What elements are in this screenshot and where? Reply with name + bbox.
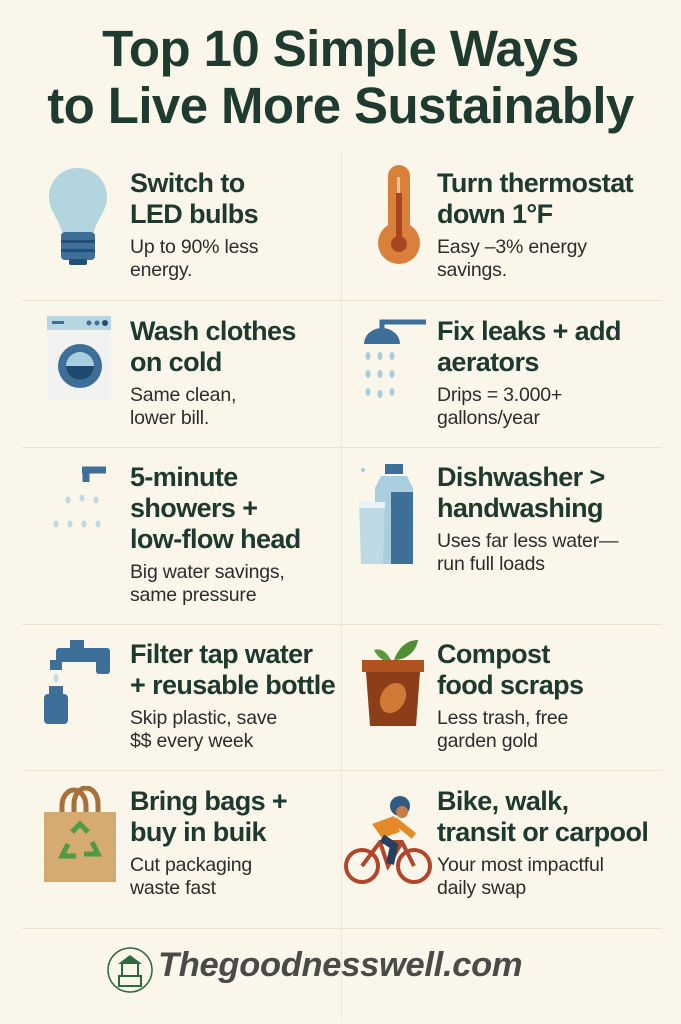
item: showers: low-flow head (130, 524, 301, 554)
item: LED: LED bulbs (130, 199, 258, 229)
icon: cyclist (344, 796, 432, 884)
item: dishwasher (437, 462, 618, 575)
item: wash cold (130, 316, 296, 429)
item: leaks: Fix leaks + add (437, 316, 621, 346)
item: wash cold: on cold (130, 347, 222, 377)
item: filter (130, 639, 335, 752)
item: compost: Less trash, free (437, 707, 568, 729)
item: leaks: gallons/year (437, 407, 540, 429)
item: bags (130, 786, 287, 899)
item: filter: $$ every week (130, 730, 253, 752)
icon: faucet drops (54, 466, 106, 528)
item: compost: food scraps (437, 670, 583, 700)
icon: washing machine (47, 316, 111, 400)
item: dishwasher: handwashing (437, 493, 603, 523)
item: wash cold: Same clean, (130, 384, 236, 406)
icon: light bulb (49, 168, 107, 265)
icon: well logo (107, 947, 153, 993)
item: showers: 5-minute (130, 462, 238, 492)
title: to Live More Sustainably (47, 77, 634, 134)
item: filter: + reusable bottle (130, 670, 335, 700)
item: thermostat: down 1°F (437, 199, 552, 229)
item: leaks: Drips = 3.000+ (437, 384, 562, 406)
item: LED (130, 168, 258, 281)
item: thermostat: savings. (437, 259, 507, 281)
item: dishwasher: Uses far less water— (437, 530, 618, 552)
title: Top 10 Simple Ways (102, 20, 579, 77)
icon: shower head (364, 320, 426, 398)
item: thermostat: Easy –3% energy (437, 236, 587, 258)
item: showers: same pressure (130, 584, 256, 606)
item: thermostat (437, 168, 634, 281)
icon: compost pot (362, 640, 424, 726)
item: bike: Bike, walk, (437, 786, 568, 816)
item: compost (437, 639, 583, 752)
item: bags: Bring bags + (130, 786, 287, 816)
icon: thermometer (378, 165, 420, 264)
item: bike: daily swap (437, 877, 526, 899)
item: showers (130, 462, 301, 606)
icon: faucet and bottle (44, 640, 110, 724)
item: showers: Big water savings, (130, 561, 285, 583)
item: filter: Skip plastic, save (130, 707, 277, 729)
item: bags: waste fast (130, 877, 216, 899)
item: bags: buy in buik (130, 817, 266, 847)
item: bike (437, 786, 648, 899)
footer logo (107, 946, 522, 993)
item: wash cold: lower bill. (130, 407, 209, 429)
item: filter: Filter tap water (130, 639, 312, 669)
item: dishwasher: run full loads (437, 553, 545, 575)
item: wash cold: Wash clothes (130, 316, 296, 346)
item: leaks (437, 316, 621, 429)
item: showers: showers + (130, 493, 257, 523)
title (47, 20, 634, 134)
item: dishwasher: Dishwasher > (437, 462, 605, 492)
item: compost: Compost (437, 639, 550, 669)
item: bags: Cut packaging (130, 854, 252, 876)
item: thermostat: Turn thermostat (437, 168, 633, 198)
icon: bottle and glass (359, 464, 413, 564)
icon: tote bag (44, 786, 116, 882)
item: LED: Up to 90% less (130, 236, 258, 258)
item: LED: energy. (130, 259, 192, 281)
footer text: Thegoodnesswell.com (158, 946, 522, 984)
item: leaks: aerators (437, 347, 539, 377)
item: compost: garden gold (437, 730, 538, 752)
item: bike: transit or carpool (437, 817, 648, 847)
item: LED: Switch to (130, 168, 245, 198)
item: bike: Your most impactful (437, 854, 604, 876)
